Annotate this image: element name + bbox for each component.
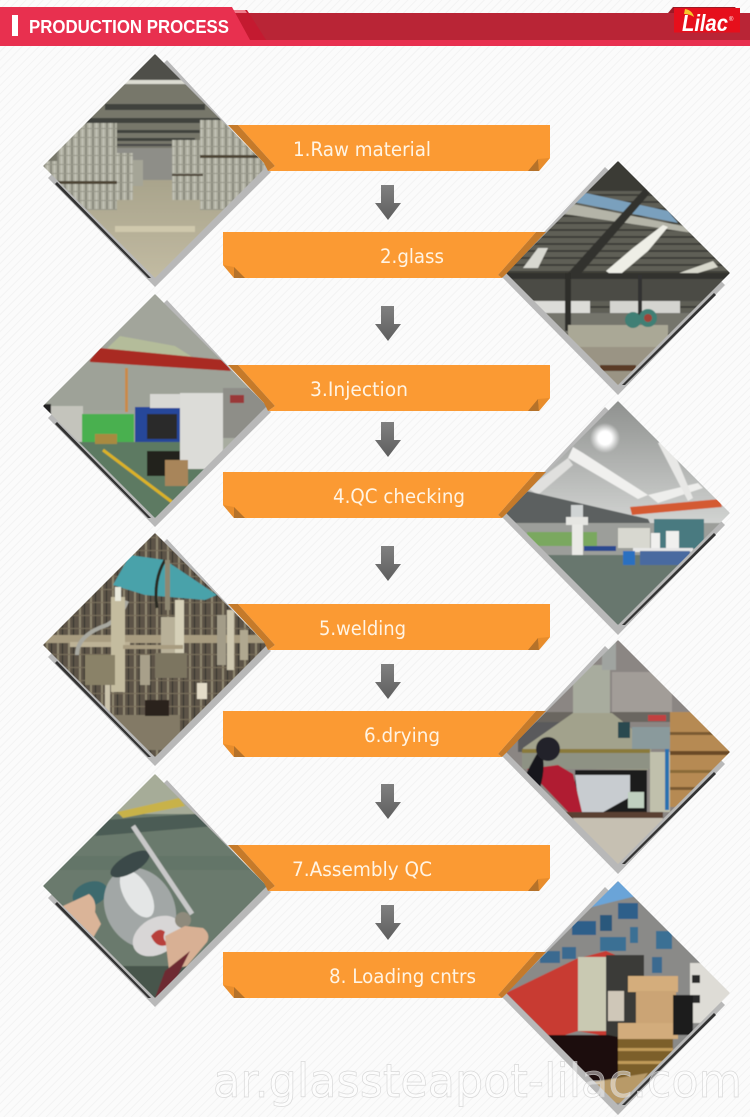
- logo: Lilac: [668, 7, 740, 36]
- ribbon: 8. Loading cntrs: [223, 952, 546, 998]
- watermark: ar.glassteapot-lilac.com: [213, 1054, 742, 1108]
- ribbon: 3.Injection: [228, 365, 550, 411]
- ribbon: 6.drying: [223, 711, 546, 757]
- header accent bar: [12, 15, 18, 36]
- logo: Lilac: ®: [729, 16, 734, 23]
- ribbon: 8. Loading cntrs: 8. Loading cntrs: [329, 965, 476, 988]
- ribbon: 7.Assembly QC: 7.Assembly QC: [292, 858, 432, 881]
- ribbon: 2.glass: 2.glass: [380, 245, 444, 268]
- arrow 2: [375, 306, 401, 341]
- arrow 6: [375, 784, 401, 819]
- header banner: [0, 7, 750, 46]
- ribbon: 7.Assembly QC: [228, 845, 550, 891]
- ribbon: 1.Raw material: [228, 125, 550, 171]
- arrow 1: [375, 185, 401, 220]
- ribbon: 5.welding: [228, 604, 550, 650]
- ribbon: 1.Raw material: 1.Raw material: [293, 138, 431, 161]
- photo: 8 loading containers: [502, 881, 730, 1115]
- arrow 5: [375, 664, 401, 699]
- ribbon: 5.welding: 5.welding: [319, 617, 406, 640]
- photo: 1 raw material warehouse: [43, 54, 271, 287]
- arrow 3: [375, 422, 401, 457]
- ribbon: 4.QC checking: [223, 472, 546, 518]
- ribbon: 2.glass: [223, 232, 546, 278]
- ribbon: 4.QC checking: 4.QC checking: [333, 485, 465, 508]
- photo: 7 assembly QC: [43, 774, 271, 1007]
- logo: Lilac: Lilac: [682, 10, 728, 36]
- heading: PRODUCTION PROCESS: [29, 16, 229, 37]
- photo: 6 drying tunnel: [502, 640, 730, 874]
- photo: 5 welding machines: [43, 533, 271, 766]
- photo: 2 glass workshop: [502, 161, 730, 395]
- arrow 4: [375, 546, 401, 581]
- ribbon: 6.drying: 6.drying: [364, 724, 440, 747]
- ribbon: 3.Injection: 3.Injection: [310, 378, 408, 401]
- photo: 3 injection machines: [43, 294, 271, 527]
- arrow 7: [375, 905, 401, 940]
- photo: 4 QC checking workshop: [502, 401, 730, 635]
